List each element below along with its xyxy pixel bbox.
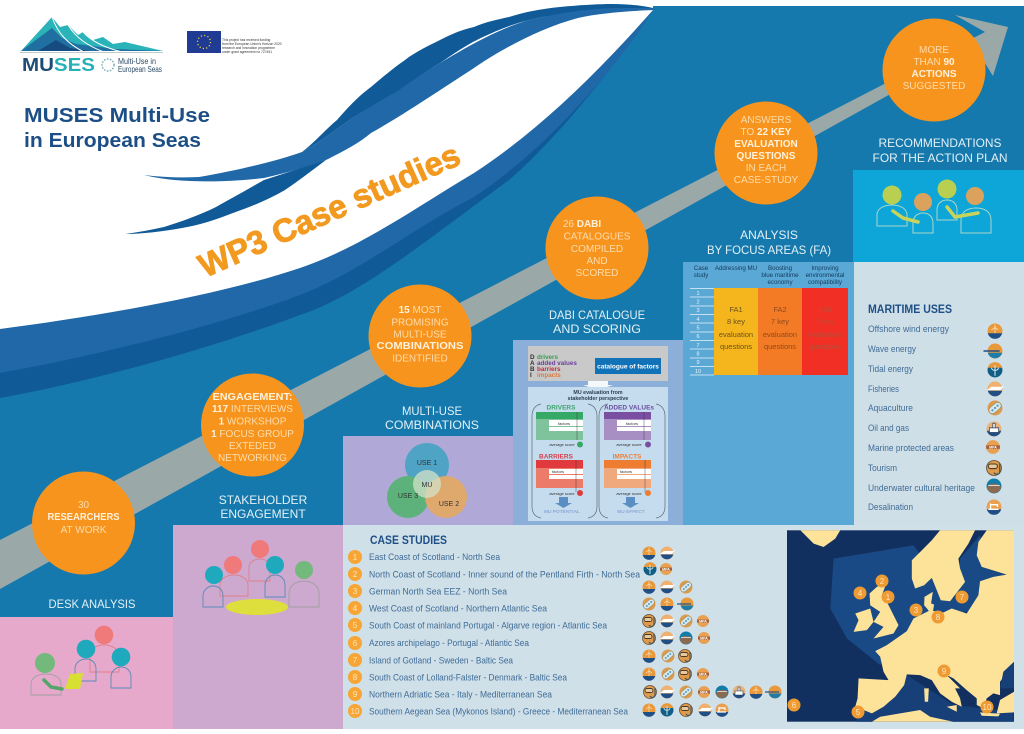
result: MU potential: MU POTENTIAL [544,509,580,515]
case study markers on map: 6 [792,701,797,710]
column: FA3: FA3 [818,305,832,314]
venn diagram [387,443,467,518]
DABI legend box: B [530,366,535,373]
EU flag and funding statement: from the European Union's Horizon 2020 [222,42,282,46]
step circle: researchers: 30 [78,500,89,511]
case study rows: 10 [695,369,701,375]
case study 5: 5 [353,621,358,630]
case study rows [690,288,714,375]
step circle: evaluation questions: TO 22 KEY [741,127,792,138]
legend list: Underwater cultural heritage [868,483,975,493]
case study rows: 4 [696,317,700,323]
DABI legend box: I [530,372,532,379]
EU flag and funding statement: This project has received funding [222,38,271,42]
heading: WP3 Case studies: WP3 Case studies [193,136,465,284]
EU flag and funding statement: under grant agreement no 727451 [222,50,272,54]
column: FA1: questions [720,342,752,351]
case study 7: Island of Gotland - Sweden - Baltic Sea [369,656,513,666]
column: FA1: FA1 [729,305,743,314]
step circle: DABI catalogues: CATALOGUES [564,232,631,242]
case study 6 [348,632,710,650]
column: FA2: 7 key [771,317,789,326]
case study markers on map [788,574,994,718]
case study 10: Southern Aegean Sea (Mykonos Island) - Greece - Mediterranean Sea [369,706,628,716]
table headers [694,265,844,286]
step circle: evaluation questions: QUESTIONS [737,151,796,162]
column: FA1: evaluation [719,330,753,339]
legend list: Offshore wind energy [868,324,949,334]
column: FA1 [714,288,758,375]
case study 1: 1 [353,553,358,562]
step circle: combinations: PROMISING [391,318,449,328]
panel: multi-use combinations [343,436,513,525]
case study 8: MPA [699,672,707,676]
column: FA2: FA2 [773,305,787,314]
heading: DABI catalogue and scoring: AND SCORING [553,322,641,336]
evaluation box [528,387,668,521]
heading: recommendations [872,136,1008,165]
drivers table: DRIVERS [547,404,576,412]
table headers: economy [767,279,793,286]
column: FA3: 7 key [816,317,834,326]
column: FA3: evaluation [808,330,842,339]
case study rows: 6 [696,334,700,340]
step circle: engagement: NETWORKING [218,453,287,464]
legend list: Wave energy [868,344,916,354]
added values table: average score [616,442,642,447]
legend list: MPA [989,446,997,450]
EU flag and funding statement: research and innovation programme [222,46,275,50]
map of Europe [787,530,1014,722]
heading: stakeholder engagement: STAKEHOLDER [219,493,308,507]
heading: analysis by focus areas [707,228,831,257]
table headers: compatibility [808,279,843,286]
venn diagram: USE 3 [398,493,418,500]
added values table: ADDED VALUEs [604,404,654,412]
step circle: researchers: RESEARCHERS [48,512,120,523]
panel: recommendations [853,170,1024,262]
MUSES logo: MUSES [22,55,95,75]
case study 9: Northern Adriatic Sea - Italy - Mediterranean Sea [369,690,552,700]
DABI legend box: added values [537,360,577,367]
step circle: actions: MORE [919,45,949,56]
icon: researchers with laptop [31,626,131,695]
step circle: engagement: 117 INTERVIEWS [212,404,293,415]
heading: DABI catalogue and scoring: DABI CATALOGUE [549,308,645,322]
step circle: actions: THAN 90 [913,57,955,68]
legend list [868,324,1004,515]
case study 5: South Coast of mainland Portugal - Algarve region - Atlantic Sea [369,620,607,630]
barriers table [536,454,583,496]
step circle: engagement: 1 WORKSHOP [219,416,287,428]
venn diagram: USE 1 [417,460,437,467]
column: FA2: questions [764,342,796,351]
heading: multi-use combinations: COMBINATIONS [385,418,479,432]
step circle: engagement: 1 FOCUS GROUP [211,429,294,440]
step circle: DABI catalogues: 26 DABI [563,219,601,230]
MUSES logo: Multi-Use in [118,57,156,66]
panel: case studies [343,525,1024,729]
case study 10 [348,703,728,718]
step circle: evaluation questions: IN EACH [746,163,786,174]
added values table: factors [626,421,638,426]
heading: DABI catalogue and scoring [549,308,645,336]
DABI legend box: barriers [537,366,561,373]
swoosh [125,4,653,234]
case study rows: 8 [696,352,700,358]
heading: analysis by focus areas: BY FOCUS AREAS (FA) [707,243,831,257]
heading: stakeholder engagement [219,493,308,521]
case study 6: MPA [700,636,708,640]
case study 4: 4 [353,604,358,613]
case study markers on map: 9 [942,667,947,676]
progress arrow [0,15,1008,589]
heading: multi-use combinations: MULTI-USE [402,404,462,418]
panel: maritime uses [854,262,1024,525]
legend list: Tourism [868,463,897,473]
step circle: combinations: MULTI-USE [393,330,447,340]
impacts table: factors [620,469,632,474]
case study rows: 9 [696,360,700,366]
DABI legend box: D [530,354,535,361]
case study 9: 9 [353,690,358,699]
DABI legend box: catalogue of factors [597,364,659,370]
legend list: Tidal energy [868,364,913,374]
case study 8: 8 [353,673,358,682]
column: FA2 [758,288,802,375]
case study 6: Azores archipelago - Portugal - Atlantic Sea [369,638,529,648]
step circle: combinations [368,284,472,388]
MUSES logo: European Seas [118,65,162,74]
heading: maritime uses: MARITIME USES [868,304,952,316]
drivers table: factors [558,421,570,426]
title: in European Seas [24,130,201,152]
legend list: Desalination [868,502,913,512]
case study rows: 7 [696,343,700,349]
legend list: Oil and gas [868,423,909,433]
case study 3 [348,580,693,598]
case study 7: 7 [353,656,358,665]
heading: case studies: CASE STUDIES [370,535,447,547]
case study 5 [348,614,709,632]
heading: analysis by focus areas: ANALYSIS [740,228,798,242]
case study rows: 2 [696,300,700,306]
venn diagram: USE 2 [439,501,459,508]
panel: DABI catalogue [513,340,683,525]
case study 1 [348,546,675,564]
case study 2: North Coast of Scotland - Inner sound of the Pentland Firth - North Sea [369,570,640,580]
MUSES logo [20,17,163,75]
step circle: researchers [32,472,135,574]
panel: focus areas [683,262,854,525]
heading: multi-use combinations [385,404,479,432]
case study markers on map: 4 [858,589,863,598]
barriers table: average score [549,491,575,496]
legend list: Aquaculture [868,403,913,413]
step circle: researchers: AT WORK [61,525,107,536]
table headers: blue maritime [761,272,799,279]
DABI legend box: impacts [537,372,561,379]
case study 2: MPA [662,568,670,572]
DABI legend box: A [530,360,535,367]
step circle: engagement: ENGAGEMENT: [212,392,292,403]
case study 4 [348,598,694,615]
case study markers on map: 7 [960,593,965,602]
added values table [604,404,654,448]
case study 2 [348,562,672,581]
legend list: Fisheries [868,384,899,394]
legend list: Marine protected areas [868,443,954,453]
step circle: evaluation questions: ANSWERS [741,115,792,126]
case study 6: 6 [353,639,358,648]
column: FA1: 8 key [727,317,745,326]
case study 1: East Coast of Scotland - North Sea [369,552,500,562]
step circle: engagement: EXTEDED [229,441,276,452]
heading: desk analysis: DESK ANALYSIS [48,597,136,611]
case study markers on map: 1 [886,593,891,602]
barriers table: BARRIERS [539,454,574,460]
table headers: Improving [811,265,839,272]
barriers table: factors [552,469,564,474]
step circle: evaluation questions: CASE-STUDY [734,175,799,186]
column: FA3 [802,288,848,375]
step circle: actions: ACTIONS [912,69,957,80]
case study 5: MPA [699,620,707,624]
table headers: Addressing MU [715,265,757,272]
case study 7 [348,650,692,667]
case study 9: MPA [700,690,708,694]
heading: recommendations: FOR THE ACTION PLAN [872,151,1008,165]
DABI legend box: drivers [537,354,559,361]
heading: recommendations: RECOMMENDATIONS [878,136,1002,150]
step circle: evaluation questions: EVALUATION [734,139,798,150]
step circle: DABI catalogues: COMPILED [571,244,623,255]
heading: stakeholder engagement: ENGAGEMENT [220,507,306,521]
case study 3: 3 [353,587,358,596]
case study markers on map: 8 [936,613,941,622]
column: FA2: evaluation [763,330,797,339]
impacts table: average score [616,491,642,496]
case study 8: South Coast of Lolland-Falster - Denmark - Baltic Sea [369,672,567,682]
evaluation box: MU evaluation from [573,390,623,396]
step circle: actions [882,18,986,122]
impacts table [604,454,651,496]
case study markers on map: 3 [914,606,919,615]
case study 9 [348,686,782,701]
table headers: study [694,272,709,279]
arrow: catalogue to evaluation [583,381,613,390]
step circle: DABI catalogues: SCORED [576,268,618,279]
step circle: combinations: COMBINATIONS [376,341,464,352]
step circle: DABI catalogues [546,196,648,300]
panel: desk analysis [0,617,173,729]
title: MUSES Multi-Use [24,105,210,127]
column: FA3: questions [809,342,841,351]
venn diagram: MU [422,482,432,489]
case study markers on map: 10 [983,703,992,712]
case study rows: 3 [696,308,700,314]
DABI legend box [528,346,668,381]
table headers: Boosting [768,265,793,272]
case study 4: West Coast of Scotland - Northern Atlantic Sea [369,604,547,614]
evaluation box: stakeholder perspective [568,396,628,402]
case study 10: 10 [351,707,360,716]
step circle: combinations: 15 MOST [399,305,441,316]
case study rows: 5 [696,326,700,332]
panel: stakeholder engagement [173,525,343,729]
step circle: DABI catalogues: AND [586,256,608,267]
case study rows: 1 [696,291,700,297]
case study 3: German North Sea EEZ - North Sea [369,586,507,596]
drivers table: average score [549,442,575,447]
step circle: actions: SUGGESTED [903,81,965,92]
step circle: engagement [201,374,304,476]
table headers: Case [694,265,709,272]
step circle: evaluation questions [714,102,818,204]
title [24,105,210,152]
icon: group around table [203,540,319,615]
icon: four people in discussion [877,180,991,233]
result: MU effect: MU EFFECT [617,509,645,515]
case study markers on map: 5 [856,708,861,717]
table headers: environmental [806,272,844,279]
step circle: combinations: IDENTIFIED [392,354,448,364]
EU flag and funding statement [187,31,282,54]
case study markers on map: 2 [880,577,885,586]
drivers table [536,404,583,448]
impacts table: IMPACTS [613,454,642,460]
case study 8 [348,668,709,684]
case study 2: 2 [353,570,358,579]
